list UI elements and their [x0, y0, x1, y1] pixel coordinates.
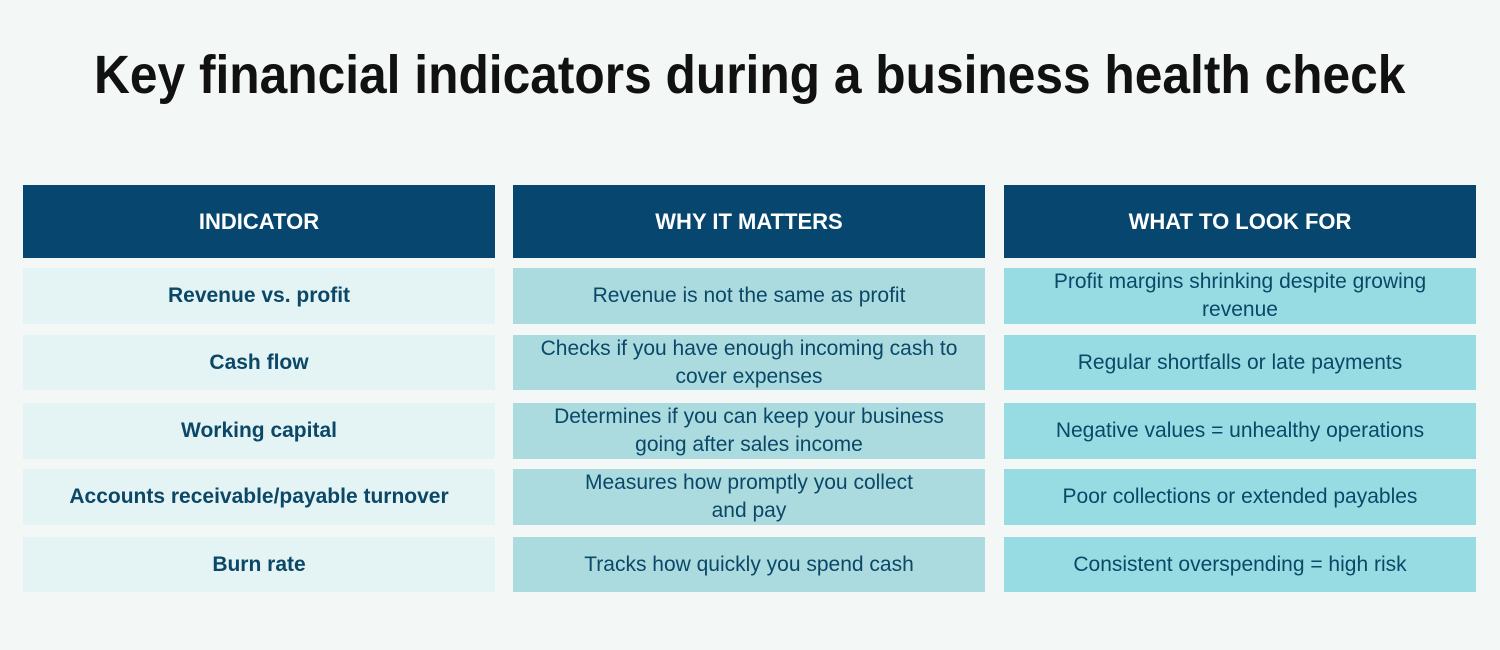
row 4 indicator	[23, 469, 495, 525]
row 1 why	[513, 268, 985, 324]
row 5 why: Tracks how quickly you spend cash	[584, 552, 914, 576]
row 2 why: cover expenses	[675, 364, 823, 388]
row 1 indicator	[23, 268, 495, 324]
row 3 why	[513, 403, 985, 459]
row 4 why: and pay	[712, 499, 786, 522]
row 5 look for	[1004, 537, 1476, 592]
row 1 why: Revenue is not the same as profit	[593, 284, 905, 307]
header: why it matters: WHY IT MATTERS	[655, 208, 843, 234]
row 1 look for	[1004, 268, 1476, 324]
row 3 why: Determines if you can keep your business	[554, 405, 944, 428]
row 3 look for: Negative values = unhealthy operations	[1056, 419, 1424, 442]
row 3 look for	[1004, 403, 1476, 459]
row 2 look for: Regular shortfalls or late payments	[1078, 350, 1402, 374]
row 3 indicator: Working capital	[181, 419, 337, 442]
title: Key financial indicators during a business health check	[94, 45, 1406, 105]
header: indicator	[23, 185, 495, 258]
row 4 look for	[1004, 469, 1476, 525]
row 4 why	[513, 469, 985, 525]
row 5 look for: Consistent overspending = high risk	[1073, 552, 1407, 576]
row 3 why: going after sales income	[635, 433, 863, 456]
row 2 look for	[1004, 335, 1476, 390]
row 5 indicator: Burn rate	[212, 552, 306, 576]
row 4 look for: Poor collections or extended payables	[1063, 485, 1417, 508]
row 2 indicator: Cash flow	[209, 350, 309, 374]
header: indicator: INDICATOR	[199, 208, 319, 234]
header: what to look for: WHAT TO LOOK FOR	[1129, 208, 1351, 234]
header: why it matters	[513, 185, 985, 258]
row 4 why: Measures how promptly you collect	[585, 471, 913, 494]
row 2 indicator	[23, 335, 495, 390]
row 4 indicator: Accounts receivable/payable turnover	[69, 485, 449, 508]
row 3 indicator	[23, 403, 495, 459]
row 2 why: Checks if you have enough incoming cash to	[541, 336, 957, 360]
row 1 look for: revenue	[1202, 298, 1278, 321]
row 1 look for: Profit margins shrinking despite growing	[1054, 270, 1426, 293]
row 5 why	[513, 537, 985, 592]
row 5 indicator	[23, 537, 495, 592]
row 2 why	[513, 335, 985, 390]
header: what to look for	[1004, 185, 1476, 258]
row 1 indicator: Revenue vs. profit	[168, 284, 350, 307]
